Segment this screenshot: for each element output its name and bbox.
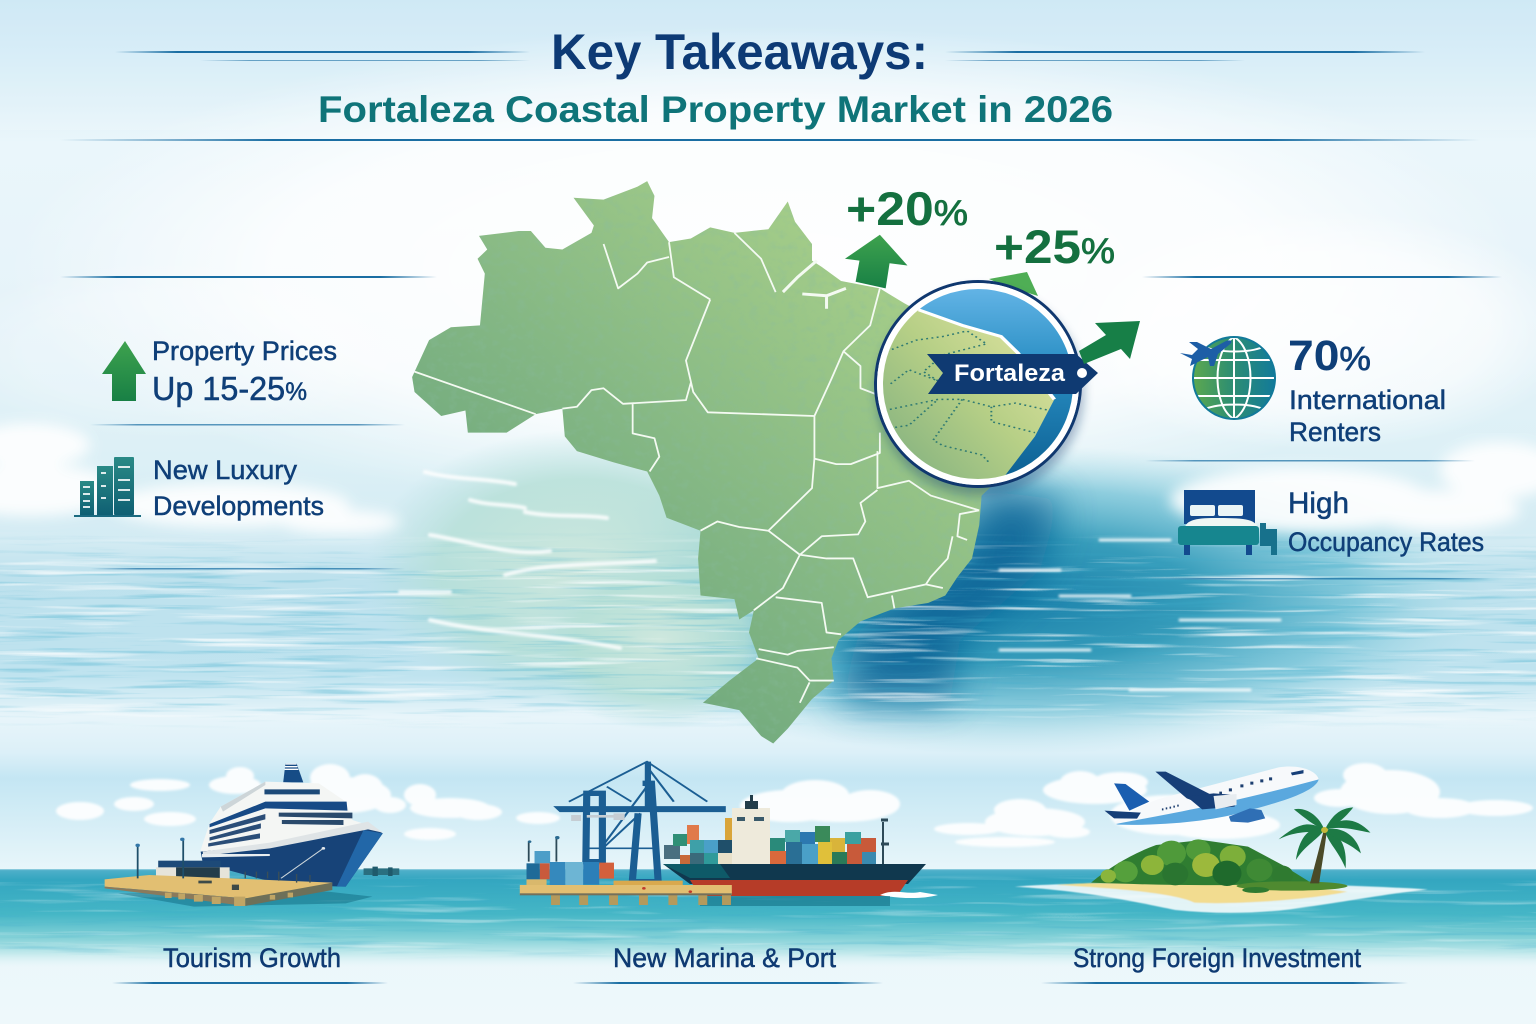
text: new luxury [153, 455, 324, 521]
text: property prices: Property Prices [152, 336, 337, 366]
growth arrow +20% [845, 235, 907, 288]
map of Brazil [412, 181, 1054, 743]
text: high occupancy rates: High [1288, 487, 1349, 520]
illustration: cruise ship [105, 763, 399, 907]
state borders [415, 233, 979, 703]
caption: New Marina & Port: New Marina & Port [613, 943, 836, 973]
icon: buildings [74, 457, 141, 517]
island sand [1015, 882, 1428, 913]
caption: Strong Foreign Investment: Strong Foreign Investment [1073, 943, 1361, 973]
text: 70% international renters: Renters [1289, 417, 1381, 447]
icon: bed [1178, 490, 1277, 555]
text: property prices [152, 336, 337, 407]
crane [555, 762, 725, 882]
panel: left stats [74, 336, 337, 521]
growth arrow +25% [989, 272, 1038, 296]
icon: globe with plane [1180, 337, 1275, 419]
subtitle: Fortaleza Coastal Property Market in 2026 [318, 89, 1113, 130]
banner: Fortaleza [927, 354, 1098, 394]
stat: +25%: +25% [994, 220, 1115, 273]
sea band [0, 869, 1536, 968]
title: Key Takeaways: [551, 24, 928, 80]
text: 70% international renters: 70% [1288, 332, 1371, 380]
caption: Tourism Growth: Tourism Growth [163, 943, 341, 973]
text: new luxury: Developments [153, 491, 324, 521]
text: 70% international renters [1288, 332, 1446, 447]
panel: right stats [1178, 332, 1484, 557]
cargo ship [663, 795, 938, 906]
zoomed coastline land [883, 308, 1056, 479]
text: 70% international renters: International [1289, 385, 1446, 415]
text: property prices: Up 15-25% [152, 370, 307, 407]
illustration: plane and island [1015, 767, 1428, 913]
palm tree [1279, 807, 1370, 883]
plane [1104, 767, 1319, 825]
text: new luxury: New Luxury [153, 455, 297, 485]
right clouds [1170, 442, 1536, 532]
island trees [1091, 839, 1348, 893]
stat: +20%: +20% [846, 182, 968, 235]
icon: up arrow [102, 341, 146, 401]
growth arrow right [1079, 321, 1140, 364]
text: high occupancy rates [1288, 487, 1484, 557]
Fortaleza magnifier [865, 280, 1098, 503]
sky clouds [56, 763, 1533, 847]
text: high occupancy rates: Occupancy Rates [1288, 527, 1484, 557]
left clouds [0, 423, 400, 534]
pier [520, 879, 732, 905]
illustration: port with crane and cargo ship [520, 762, 938, 906]
containers on pier [526, 836, 614, 885]
banner: Fortaleza: Fortaleza [954, 360, 1066, 387]
